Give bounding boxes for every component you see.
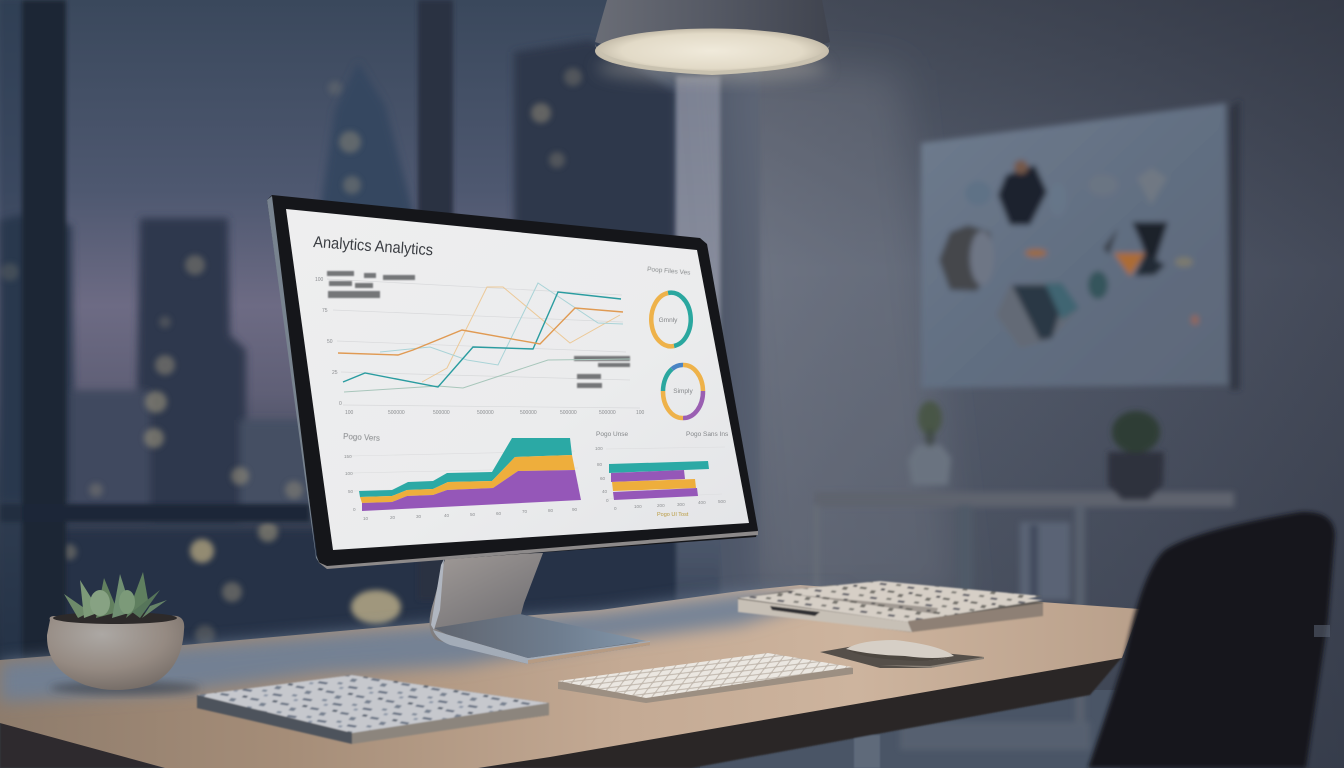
horizontal bar chart: 0: [606, 498, 609, 503]
y axis labels: 50: [327, 339, 333, 345]
horizontal bar chart: 0: [614, 506, 617, 511]
monitor stand: [429, 553, 650, 664]
plant: dark pot: [1108, 411, 1164, 500]
x axis labels: [345, 410, 645, 416]
x axis labels: 500000: [560, 410, 577, 416]
x axis labels: 500000: [477, 410, 494, 416]
x axis labels: 100: [636, 410, 645, 416]
plant: vase: [908, 401, 951, 485]
cool shadow on desk: [0, 592, 850, 702]
horizontal bar chart: Pogo Sans Ins: [686, 431, 729, 438]
horizontal bar chart: 80: [597, 462, 603, 467]
stacked area chart: 10: [363, 516, 369, 521]
y axis labels: [315, 277, 342, 407]
horizontal bar chart: 60: [600, 476, 606, 481]
horizontal bar chart: 400: [698, 500, 706, 505]
pendant lamp: [595, 0, 830, 82]
dashboard title: Analytics Analytics: [313, 234, 434, 259]
x axis labels: 500000: [433, 410, 450, 416]
potted succulent: [47, 572, 200, 695]
y axis labels: 0: [339, 401, 342, 407]
donut chart one: Poop Files Ves: [647, 266, 691, 277]
stacked area chart: [343, 432, 581, 521]
icon: orange triangle cluster: [1132, 222, 1168, 272]
light glow on the wall: [720, 60, 960, 600]
x axis labels: 500000: [520, 410, 537, 416]
x axis labels: 100: [345, 410, 354, 416]
background: wall: [700, 0, 1344, 768]
stacked area chart: 40: [444, 513, 450, 518]
desk top: [0, 585, 1140, 768]
screen: [286, 209, 749, 550]
horizontal bar chart: 100: [634, 504, 642, 509]
stacked area chart: 20: [390, 515, 396, 520]
small marks: [1025, 249, 1047, 257]
icon: dark hexagon: [998, 165, 1047, 225]
notebook: [197, 675, 549, 744]
desk: [0, 585, 1140, 768]
stacked area chart: 70: [522, 509, 528, 514]
stacked area chart: 60: [496, 511, 502, 516]
y axis labels: 100: [315, 277, 324, 283]
book stack: [738, 581, 1043, 632]
stacked area chart: 0: [353, 507, 356, 512]
mouse and mouse pad: [820, 640, 984, 668]
desk underside: [0, 655, 1124, 768]
y axis labels: 75: [322, 308, 328, 314]
pot: [47, 616, 184, 690]
monitor: [267, 195, 758, 569]
leaves: [64, 572, 167, 618]
office chair: [1088, 512, 1335, 768]
x axis labels: 500000: [388, 410, 405, 416]
city towers: [0, 40, 700, 680]
horizontal bar chart: 200: [657, 503, 665, 508]
horizontal bar chart: 100: [595, 446, 603, 451]
horizontal bar chart: [595, 431, 729, 518]
donut chart two: Simply: [673, 388, 693, 395]
horizontal bar chart: 300: [677, 502, 685, 507]
blurred legend text: [327, 271, 630, 388]
icon: slate and teal hexagon: [996, 282, 1079, 348]
pale series: [344, 283, 630, 392]
horizontal bar chart: 40: [602, 489, 608, 494]
wall poster: [921, 100, 1240, 390]
stacked area chart: 90: [572, 507, 578, 512]
monitor frame: [267, 195, 758, 568]
donut chart one: [647, 266, 691, 346]
keyboard: [558, 653, 853, 703]
stacked area chart: 150: [344, 454, 352, 459]
bright wall strip: [676, 60, 760, 600]
bokeh lights: [1, 68, 582, 645]
background: city window: [0, 0, 760, 680]
donut chart one: Gmnly: [659, 317, 678, 324]
y axis labels: 25: [332, 370, 338, 376]
stacked area chart: Pogo Vers: [343, 432, 380, 443]
horizontal bar chart: Pogo Unse: [596, 431, 629, 438]
bold series: [338, 292, 623, 387]
window frame: [0, 0, 453, 660]
icon: grey hexagon: [939, 225, 994, 291]
horizontal bar chart: Pogo UI Tost: [657, 512, 689, 518]
shelf with plants: [814, 401, 1234, 750]
line chart: [315, 271, 645, 416]
stacked area chart: 50: [470, 512, 476, 517]
x axis labels: 500000: [599, 410, 616, 416]
stacked area chart: 80: [548, 508, 554, 513]
stacked area chart: 100: [345, 471, 353, 476]
stacked area chart: 30: [416, 514, 422, 519]
donut chart two: [663, 365, 703, 418]
horizontal bar chart: 500: [718, 499, 726, 504]
stacked area chart: 50: [348, 489, 354, 494]
